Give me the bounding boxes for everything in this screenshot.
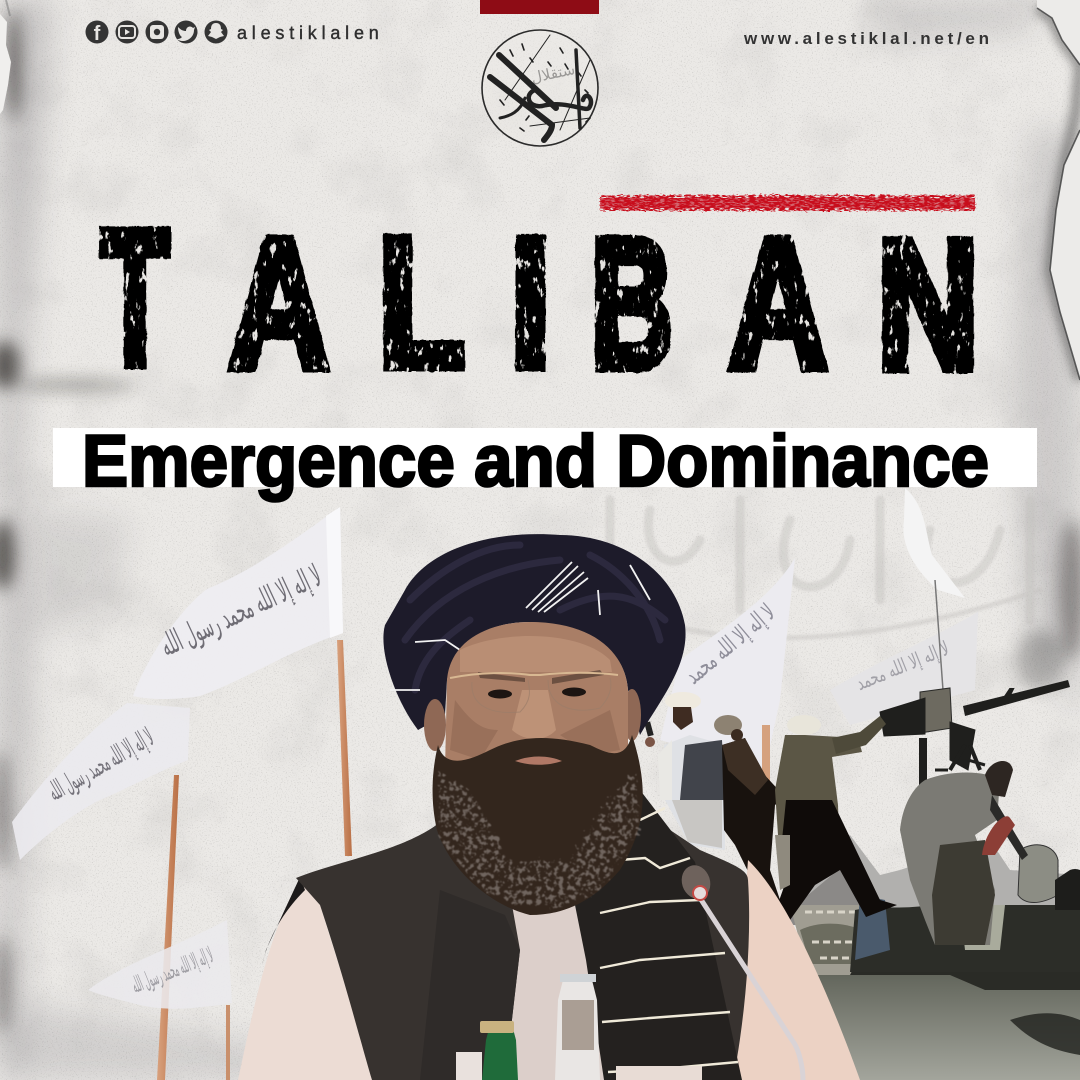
subtitle banner: Emergence and Dominance: [82, 421, 989, 502]
tank hull: [815, 845, 1080, 1080]
title: TALIBAN: L: [378, 199, 465, 405]
beard: [433, 735, 643, 915]
vest front placket: [420, 890, 520, 1080]
icon: twitter: [174, 20, 198, 44]
icon: snapchat: [204, 20, 228, 44]
fighter: man firing gun: [775, 715, 897, 920]
turban: [383, 534, 686, 735]
logo: calligraphic seal: استقلال: [529, 59, 581, 87]
title: TALIBAN: I: [510, 199, 551, 405]
website url: www.alestiklal.net/en: [743, 29, 992, 48]
flag poles: [157, 640, 352, 1080]
torn paper edge: left: [0, 0, 11, 114]
flag: lower left: لا إله إلا الله محمد رسول الله: [42, 722, 160, 808]
ears: [424, 699, 446, 751]
vest: [296, 810, 749, 1080]
title: TALIBAN: [101, 190, 979, 407]
title: TALIBAN: A: [729, 200, 827, 406]
fighter: man with dark coat: [714, 715, 785, 920]
flag: bottom left: لا إله إلا الله محمد رسول الله: [128, 942, 217, 999]
title: TALIBAN: B: [591, 200, 673, 406]
fighter: man at mortar: [900, 761, 1028, 945]
water bottle: green: [480, 1021, 518, 1080]
logo: calligraphic seal: [482, 30, 598, 146]
portrait: central figure: [238, 534, 860, 1080]
mouth: [515, 756, 562, 765]
icon: instagram: [146, 20, 168, 44]
flag: large left: [133, 507, 343, 699]
shirt right sleeve: [732, 860, 860, 1080]
top red tab: [480, 0, 599, 14]
background calligraphy: [610, 500, 1040, 638]
flags behind fighters: [660, 488, 978, 795]
scarf: [574, 790, 742, 1080]
flag: large left: لا إله إلا الله محمد رسول الله: [154, 558, 328, 665]
eyes: [478, 670, 604, 698]
red brush stroke: [600, 195, 975, 211]
microphone: [677, 862, 803, 1080]
water bottle: clear: [555, 974, 600, 1080]
kurta centre: [505, 890, 608, 1080]
title: TALIBAN: A: [229, 200, 329, 406]
fighter: man with phone: [644, 692, 725, 850]
scene: mountains and village: [780, 835, 1080, 980]
social handle: alestiklalen: [237, 23, 383, 43]
icon: youtube: [116, 20, 138, 44]
flag: bottom left: [88, 920, 232, 1009]
flags behind fighters: لا إله إلا الله محمد: [679, 598, 781, 690]
face: [445, 622, 628, 800]
shirt left sleeve: [238, 880, 372, 1080]
machine gun: [880, 680, 1070, 786]
flags behind fighters: لا إله إلا الله محمد: [852, 636, 952, 695]
title: TALIBAN: T: [101, 190, 169, 405]
dark sleeve edge: [262, 877, 305, 965]
flag: lower left: [12, 703, 190, 860]
icon: facebook: f: [94, 23, 101, 45]
social icons row: [86, 20, 228, 45]
title: TALIBAN: N: [877, 201, 979, 407]
beard grey texture: [438, 770, 640, 910]
icon: facebook: [86, 20, 108, 45]
glasses: [450, 673, 618, 713]
torn paper edge: right: [1037, 0, 1080, 380]
paper on table: [616, 1066, 702, 1080]
